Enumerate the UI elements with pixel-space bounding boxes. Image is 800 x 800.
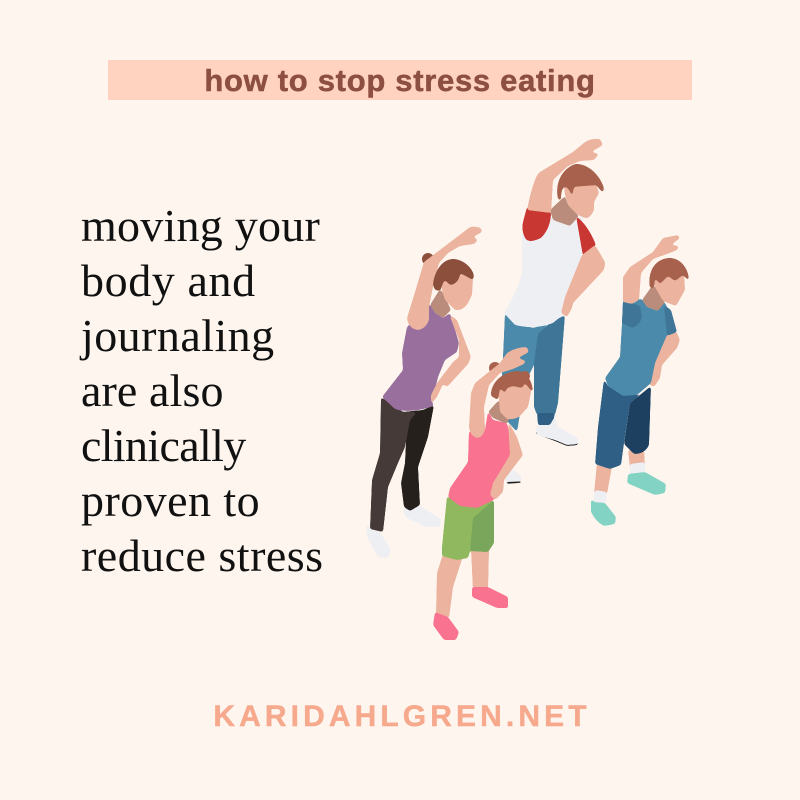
main text block: proven to [81, 475, 260, 526]
main text block: clinically [81, 420, 246, 471]
main text block: body and [81, 255, 256, 306]
main text block: reduce stress [81, 530, 324, 581]
figure: boy in blue shirt [591, 235, 689, 526]
website footer: KARIDAHLGREN.NET [213, 700, 591, 733]
title banner: how to stop stress eating [204, 63, 596, 98]
figure: girl in pink top and green shorts [433, 347, 533, 640]
figure: woman in purple top [366, 227, 482, 558]
main text block: journaling [81, 310, 275, 361]
main text block [80, 200, 324, 581]
main text block: moving your [81, 200, 320, 251]
title banner [108, 60, 692, 100]
figure: man in white and red shirt [500, 139, 605, 484]
main text block: are also [81, 365, 224, 416]
